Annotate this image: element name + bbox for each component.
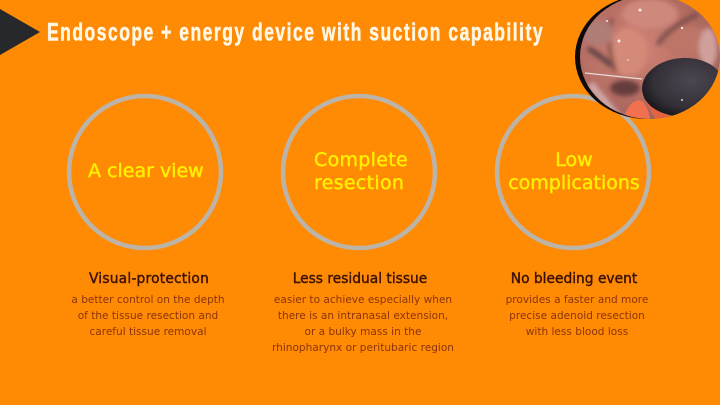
column 2 text: there is an intranasal extension, <box>278 310 448 322</box>
circle label: complete resection: resection <box>314 172 404 194</box>
endoscopic photo <box>575 0 720 119</box>
dark probe tip <box>642 58 718 116</box>
circle ring: complete resection <box>280 94 438 250</box>
circle ring: a clear view <box>66 94 224 250</box>
column 3 text: with less blood loss <box>526 326 628 338</box>
column 3 text: provides a faster and more <box>506 294 648 306</box>
circle label: low complications: Low <box>555 149 593 171</box>
circle label: complete resection <box>314 149 408 194</box>
orange tool parts <box>624 100 650 119</box>
column 2 text <box>272 294 454 354</box>
circle ring: low complications <box>494 94 652 250</box>
column 2 text: easier to achieve especially when <box>274 294 452 306</box>
column 1 text: a better control on the depth <box>71 294 225 306</box>
circle label: low complications: complications <box>508 172 640 194</box>
column 3 text <box>506 294 648 338</box>
circle label: a clear view: A clear view <box>88 160 204 182</box>
column 1 text: careful tissue removal <box>89 326 207 338</box>
column 1 text <box>71 294 225 338</box>
icon: dark arrow marker <box>0 9 40 55</box>
column 1 text: of the tissue resection and <box>78 310 218 322</box>
title: Endoscope + energy device with suction capability <box>47 17 543 46</box>
column 3 text: precise adenoid resection <box>509 310 645 322</box>
circle label: low complications <box>508 149 640 194</box>
column 2 heading: Less residual tissue <box>293 271 427 287</box>
column 3 heading: No bleeding event <box>511 271 637 287</box>
column 1 heading: Visual-protection <box>89 271 209 287</box>
circle label: complete resection: Complete <box>314 149 408 171</box>
column 2 text: rhinopharynx or peritubaric region <box>272 342 454 354</box>
column 2 text: or a bulky mass in the <box>305 326 421 338</box>
suction wire <box>585 73 642 79</box>
